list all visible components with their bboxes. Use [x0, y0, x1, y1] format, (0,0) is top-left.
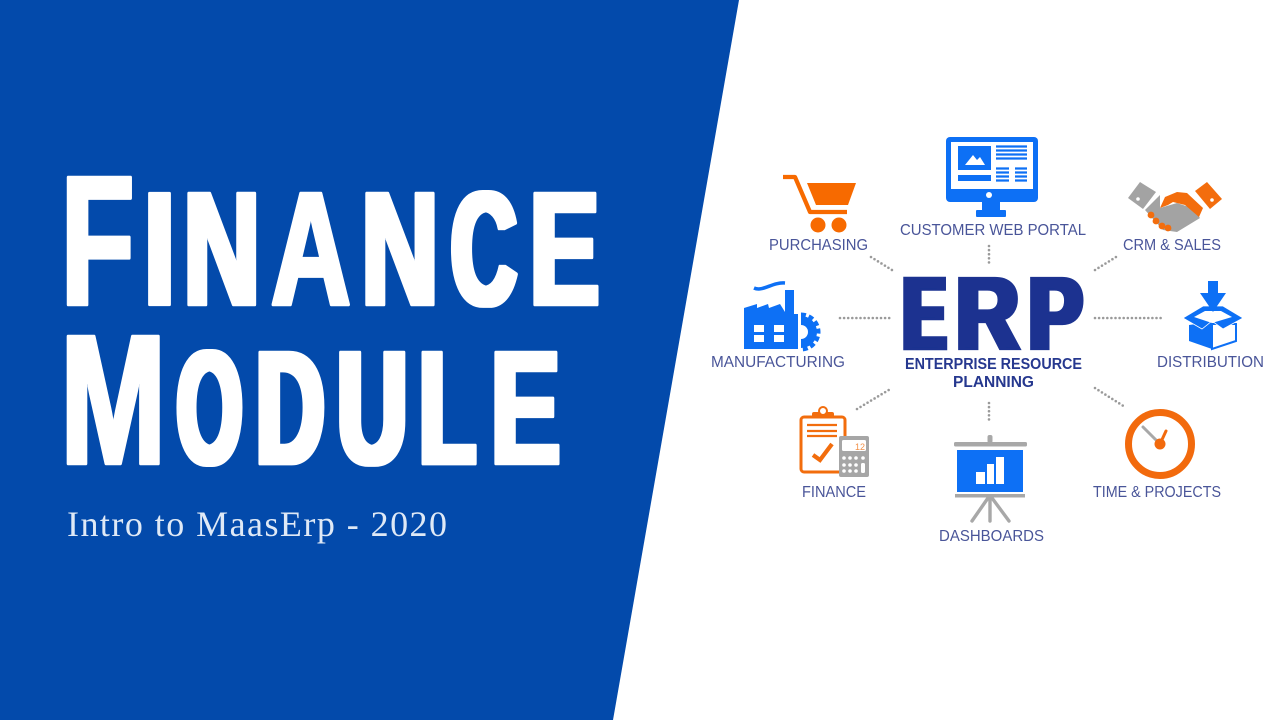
label: distribution: DISTRIBUTION [1157, 354, 1264, 371]
title line: Finance: E [530, 159, 599, 339]
center subheading [905, 356, 1082, 391]
label: purchasing: PURCHASING [769, 237, 868, 254]
label: dashboards: DASHBOARDS [939, 528, 1044, 545]
icon: clipboard and calculator: 12 [855, 442, 865, 452]
center subheading: ENTERPRISE RESOURCE [905, 356, 1082, 373]
label: manufacturing: MANUFACTURING [711, 354, 845, 371]
label: finance: FINANCE [802, 484, 866, 501]
title line: Finance: N [183, 158, 260, 339]
center heading: ERP [904, 255, 1082, 372]
icon: clock [1128, 412, 1192, 476]
icon: distribution box [1183, 281, 1243, 349]
title line: Finance: C [451, 159, 516, 339]
connector dots [840, 246, 1163, 422]
title line: Finance: I [140, 159, 179, 339]
label: customer web portal: CUSTOMER WEB PORTAL [900, 222, 1086, 239]
icon: handshake [1128, 182, 1222, 232]
icon: monitor [946, 137, 1038, 217]
ERP diagram [711, 137, 1264, 545]
title line: Module: O [177, 319, 242, 499]
icon: shopping cart [783, 177, 856, 232]
icon: factory [744, 283, 818, 350]
title line: Module: E [490, 318, 560, 498]
title line: Finance [61, 137, 599, 344]
title line: Module: L [419, 317, 475, 498]
title line: Finance: N [361, 160, 439, 340]
title line: Module: U [337, 319, 407, 499]
title line: Module [60, 297, 560, 503]
center heading: ERP: E [904, 256, 945, 371]
center heading: ERP: R [956, 257, 1019, 372]
icon: clipboard and calculator [801, 407, 869, 477]
title line: Finance: A [271, 160, 351, 340]
icon: dashboard easel [954, 435, 1027, 521]
subtitle: Intro to MaasErp - 2020 [67, 504, 447, 544]
title line: Module: M [60, 297, 166, 503]
title line: Module: D [256, 317, 324, 498]
title line: Finance: F [61, 137, 134, 344]
center heading: ERP: P [1029, 255, 1082, 371]
label: crm and sales: CRM & SALES [1123, 237, 1221, 254]
center subheading: PLANNING [953, 374, 1034, 391]
title [60, 137, 599, 503]
blue slanted panel [0, 0, 739, 720]
label: time and projects: TIME & PROJECTS [1093, 484, 1221, 501]
